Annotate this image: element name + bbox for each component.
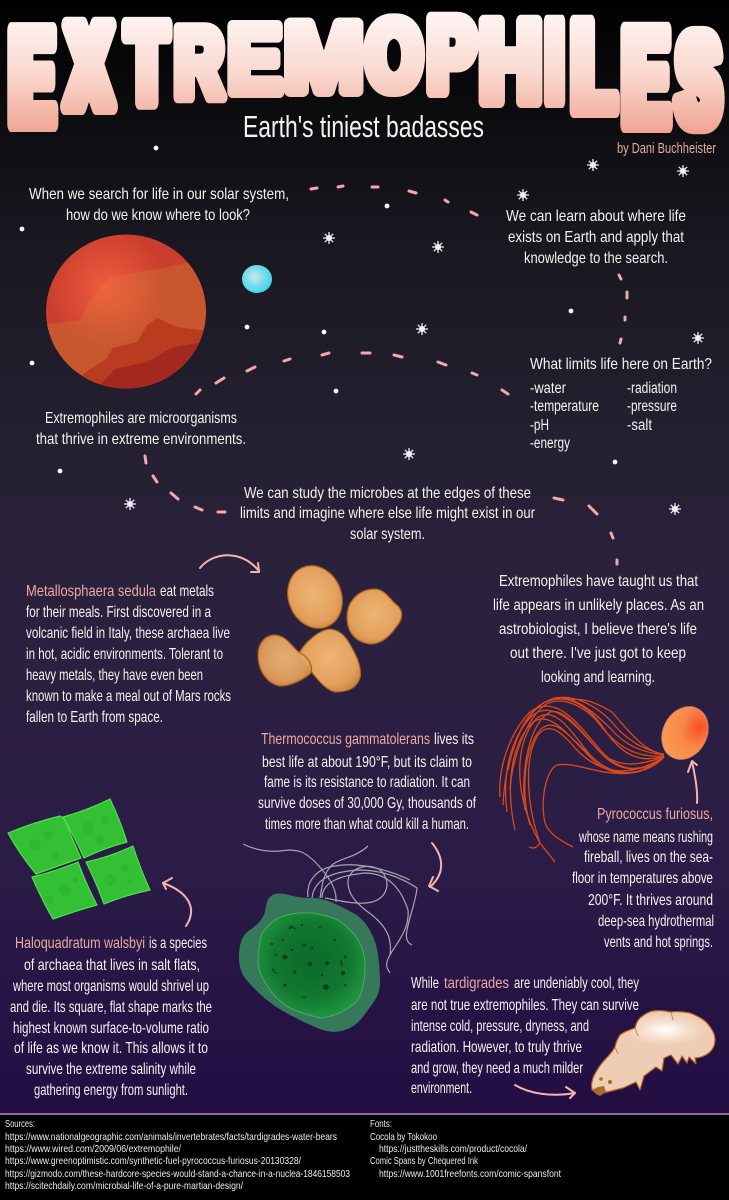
text: study the microbes: limits and imagine where else life might exist in our — [240, 505, 536, 522]
text: definition — [36, 410, 246, 448]
title: E — [12, 2, 52, 153]
text: Haloquadratum walsbyi — [10, 935, 212, 1099]
footer panel — [0, 1113, 729, 1200]
icon: Thermococcus cell — [239, 894, 380, 1032]
text: sources: https://gizmodo.com/these-hardcore-species-would-stand-a-chance-in-a-nuclea-1846158503 — [5, 1168, 350, 1180]
text: opening question — [29, 186, 289, 224]
text: Haloquadratum walsbyi: Haloquadratum walsbyi — [15, 935, 145, 952]
text: fonts: https://www.1001freefonts.com/comic-spansfont — [379, 1168, 561, 1180]
dashed path: microbes to conclusion — [554, 498, 617, 564]
arrow: to tardigrade — [515, 1085, 575, 1098]
text: Metallosphaera sedula: Metallosphaera sedula — [26, 583, 156, 600]
text: what limits life: -salt — [627, 417, 653, 434]
text: conclusion: out there. I've just got to keep — [510, 645, 686, 662]
dashed path: search to limits — [619, 275, 627, 343]
icon: Pyrococcus cell — [653, 698, 717, 768]
text: definition: Extremophiles are microorganisms — [45, 410, 237, 427]
text: Metallosphaera sedula — [26, 583, 231, 726]
text: Haloquadratum walsbyi: survive the extreme salinity while — [26, 1061, 196, 1078]
text: opening question: When we search for life in our solar system, — [29, 186, 289, 203]
text: conclusion — [493, 573, 704, 686]
text: Haloquadratum walsbyi: of life as we know it. This allows it to — [14, 1040, 208, 1057]
text: tardigrades: radiation. However, to truly thrive — [411, 1039, 582, 1056]
dashed path: limits to definition — [196, 353, 508, 394]
title: E — [228, 5, 282, 113]
icon: Thermococcus flagella — [243, 844, 417, 973]
title: I — [548, 0, 562, 126]
title: O — [367, 1, 421, 111]
text: Thermococcus gammatolerans: best life at about 190°F, but its claim to — [262, 754, 472, 771]
text: fonts: Comic Spans by Chequered Ink — [370, 1155, 479, 1167]
text: Thermococcus gammatolerans: fame is its resistance to radiation. It can — [264, 774, 470, 791]
arrow: to Thermococcus — [429, 843, 441, 891]
text: fonts: Fonts: — [370, 1118, 392, 1130]
icon: tardigrade — [592, 1011, 715, 1096]
text: Haloquadratum walsbyi: of archaea that lives in salt flats, — [24, 957, 200, 974]
text: opening question: how do we know where to look? — [66, 207, 250, 224]
text: definition: that thrive in extreme environments. — [36, 431, 246, 448]
text: Thermococcus gammatolerans — [258, 731, 476, 833]
text: sources: https://www.wired.com/2009/06/extremophile/ — [5, 1143, 181, 1155]
text: learning on Earth: exists on Earth and apply that — [508, 229, 684, 246]
text: what limits life — [530, 356, 712, 452]
text: fonts: Cocola by Tokokoo — [370, 1131, 437, 1143]
text: tardigrades: While — [411, 975, 439, 992]
text: tardigrades: intense cold, pressure, dryness, and — [411, 1018, 589, 1035]
text: what limits life: -pH — [530, 417, 549, 434]
dashed path: definition to microbes — [145, 456, 225, 512]
title: H — [480, 0, 541, 126]
text: learning on Earth — [506, 208, 686, 267]
text: Pyrococcus furiosus — [572, 806, 714, 951]
text: what limits life: -temperature — [530, 398, 599, 415]
text: Thermococcus gammatolerans: survive doses of 30,000 Gy, thousands of — [258, 795, 476, 812]
text: fonts — [370, 1118, 561, 1180]
text: Haloquadratum walsbyi: highest known surface-to-volume ratio — [13, 1020, 209, 1037]
text: tardigrades: and grow, they need a much milder — [411, 1060, 583, 1077]
text: Haloquadratum walsbyi: and die. Its square, flat shape marks the — [10, 999, 212, 1016]
arrow: to Haloquadratum — [163, 878, 191, 926]
text: what limits life: -energy — [530, 435, 570, 452]
title — [12, 0, 719, 154]
text: what limits life: -pressure — [627, 398, 677, 415]
text: Haloquadratum walsbyi: is a species — [149, 935, 207, 952]
icon: Pyrococcus flagella — [500, 697, 664, 862]
text: sources: https://www.greenoptimistic.com/synthetic-fuel-pyrococcus-furiosus-20130328/ — [5, 1155, 301, 1167]
text: Haloquadratum walsbyi: gathering energy from sunlight. — [34, 1082, 188, 1099]
arrow: to Pyrococcus — [688, 761, 697, 803]
text: Thermococcus gammatolerans: times more than what could kill a human. — [265, 816, 469, 833]
title: S — [678, 10, 719, 153]
text: sources: https://scitechdaily.com/microbial-life-of-a-pure-martian-design/ — [5, 1180, 243, 1192]
icon: blue moon — [242, 265, 272, 293]
title: R — [175, 6, 223, 118]
text: Thermococcus gammatolerans: Thermococcus gammatolerans — [261, 731, 430, 748]
icon: red planet — [46, 234, 206, 388]
text: study the microbes — [240, 485, 536, 543]
stars — [20, 146, 704, 515]
subtitle: Earth's tiniest badasses — [243, 109, 484, 144]
text: Metallosphaera sedula: fallen to Earth from space. — [26, 709, 163, 726]
text: tardigrades: are not true extremophiles. They can survive — [411, 997, 639, 1014]
text: study the microbes: We can study the microbes at the edges of these — [244, 485, 531, 502]
icon: Metallosphaera cells — [258, 557, 402, 692]
arrow: to Metallosphaera — [200, 555, 259, 572]
text: learning on Earth: knowledge to the search. — [524, 250, 668, 267]
text: tardigrades: are undeniably cool, they — [514, 975, 639, 992]
text: conclusion: looking and learning. — [541, 669, 655, 686]
text: what limits life: -radiation — [627, 380, 677, 397]
title: T — [128, 1, 166, 127]
text: Metallosphaera sedula: for their meals. First discovered in a — [26, 604, 211, 621]
text: Metallosphaera sedula: volcanic field in Italy, these archaea live — [26, 625, 230, 642]
text: sources — [5, 1118, 350, 1192]
text: tardigrades: tardigrades — [444, 975, 509, 992]
icon: Haloquadratum squares — [8, 799, 150, 919]
text: study the microbes: solar system. — [350, 526, 425, 543]
text: learning on Earth: We can learn about where life — [506, 208, 686, 225]
text: Metallosphaera sedula: heavy metals, they have even been — [26, 667, 203, 684]
title: E — [625, 1, 666, 154]
text: sources: https://www.nationalgeographic.com/animals/invertebrates/facts/tardigrades-water-bears — [5, 1131, 337, 1143]
text: Metallosphaera sedula: eat metals — [160, 583, 214, 600]
dashed path: question to search — [311, 186, 477, 215]
title: X — [68, 0, 110, 133]
text: tardigrades — [411, 975, 639, 1097]
text: what limits life: -water — [530, 380, 566, 397]
text: sources: Sources: — [5, 1118, 35, 1130]
text: Thermococcus gammatolerans: lives its — [434, 731, 474, 748]
text: Haloquadratum walsbyi: where most organisms would shrivel up — [12, 978, 209, 995]
text: Metallosphaera sedula: in hot, acidic environments. Tolerant to — [26, 646, 223, 663]
title: M — [284, 4, 364, 112]
text: fonts: https://justtheskills.com/product/cocola/ — [379, 1143, 527, 1155]
text: tardigrades: environment. — [411, 1080, 472, 1097]
text: Metallosphaera sedula: known to make a meal out of Mars rocks — [26, 688, 231, 705]
